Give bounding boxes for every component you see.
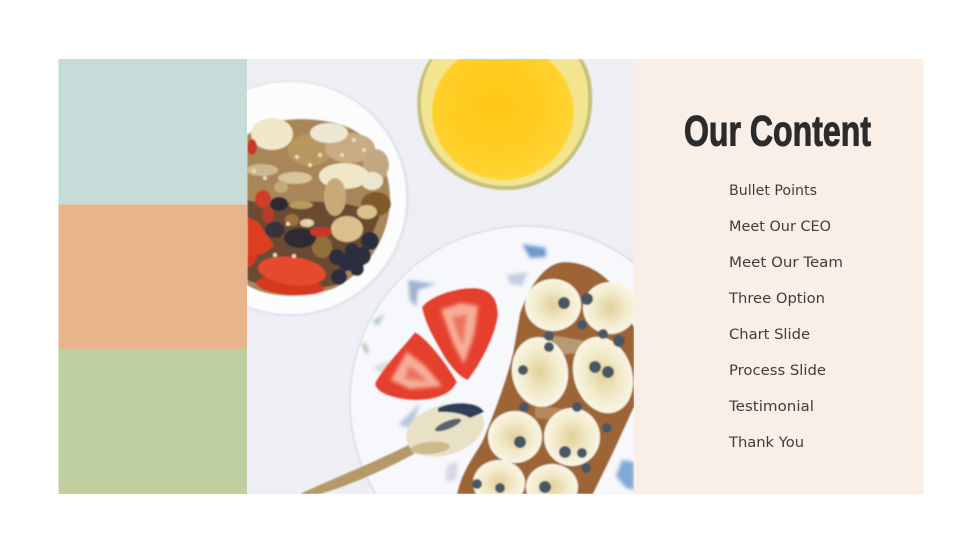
icon: strawberry halves: [375, 288, 498, 400]
list item 3: Meet Our Team: [729, 255, 843, 271]
icon: glass of orange juice: [417, 44, 592, 190]
icon: golden spoon: [300, 402, 484, 494]
panel: contents: [634, 59, 924, 494]
list item 4: Three Option: [728, 291, 825, 307]
heading: Our Content: Our Content: [684, 108, 871, 156]
list item 5: Chart Slide: [729, 327, 810, 343]
list item 2: Meet Our CEO: [729, 219, 831, 235]
list item 6: Process Slide: [729, 363, 826, 379]
list item 1: Bullet Points: [729, 183, 817, 199]
panel: teal colour block: [58, 59, 247, 204]
panel: green colour block: [58, 349, 247, 494]
list item 7: Testimonial: [728, 399, 814, 415]
photo: breakfast table: [247, 59, 634, 494]
list: contents items: [728, 183, 843, 451]
infographic slide canvas: [58, 59, 924, 494]
icon: floral plate: [349, 225, 634, 494]
icon: toast with peanut butter: [457, 262, 634, 494]
icon: banana slices with chocolate chips: [472, 278, 634, 494]
panel: orange colour block: [58, 204, 247, 349]
icon: bowl of granola and fruit: [247, 82, 408, 316]
list item 8: Thank You: [728, 435, 804, 451]
